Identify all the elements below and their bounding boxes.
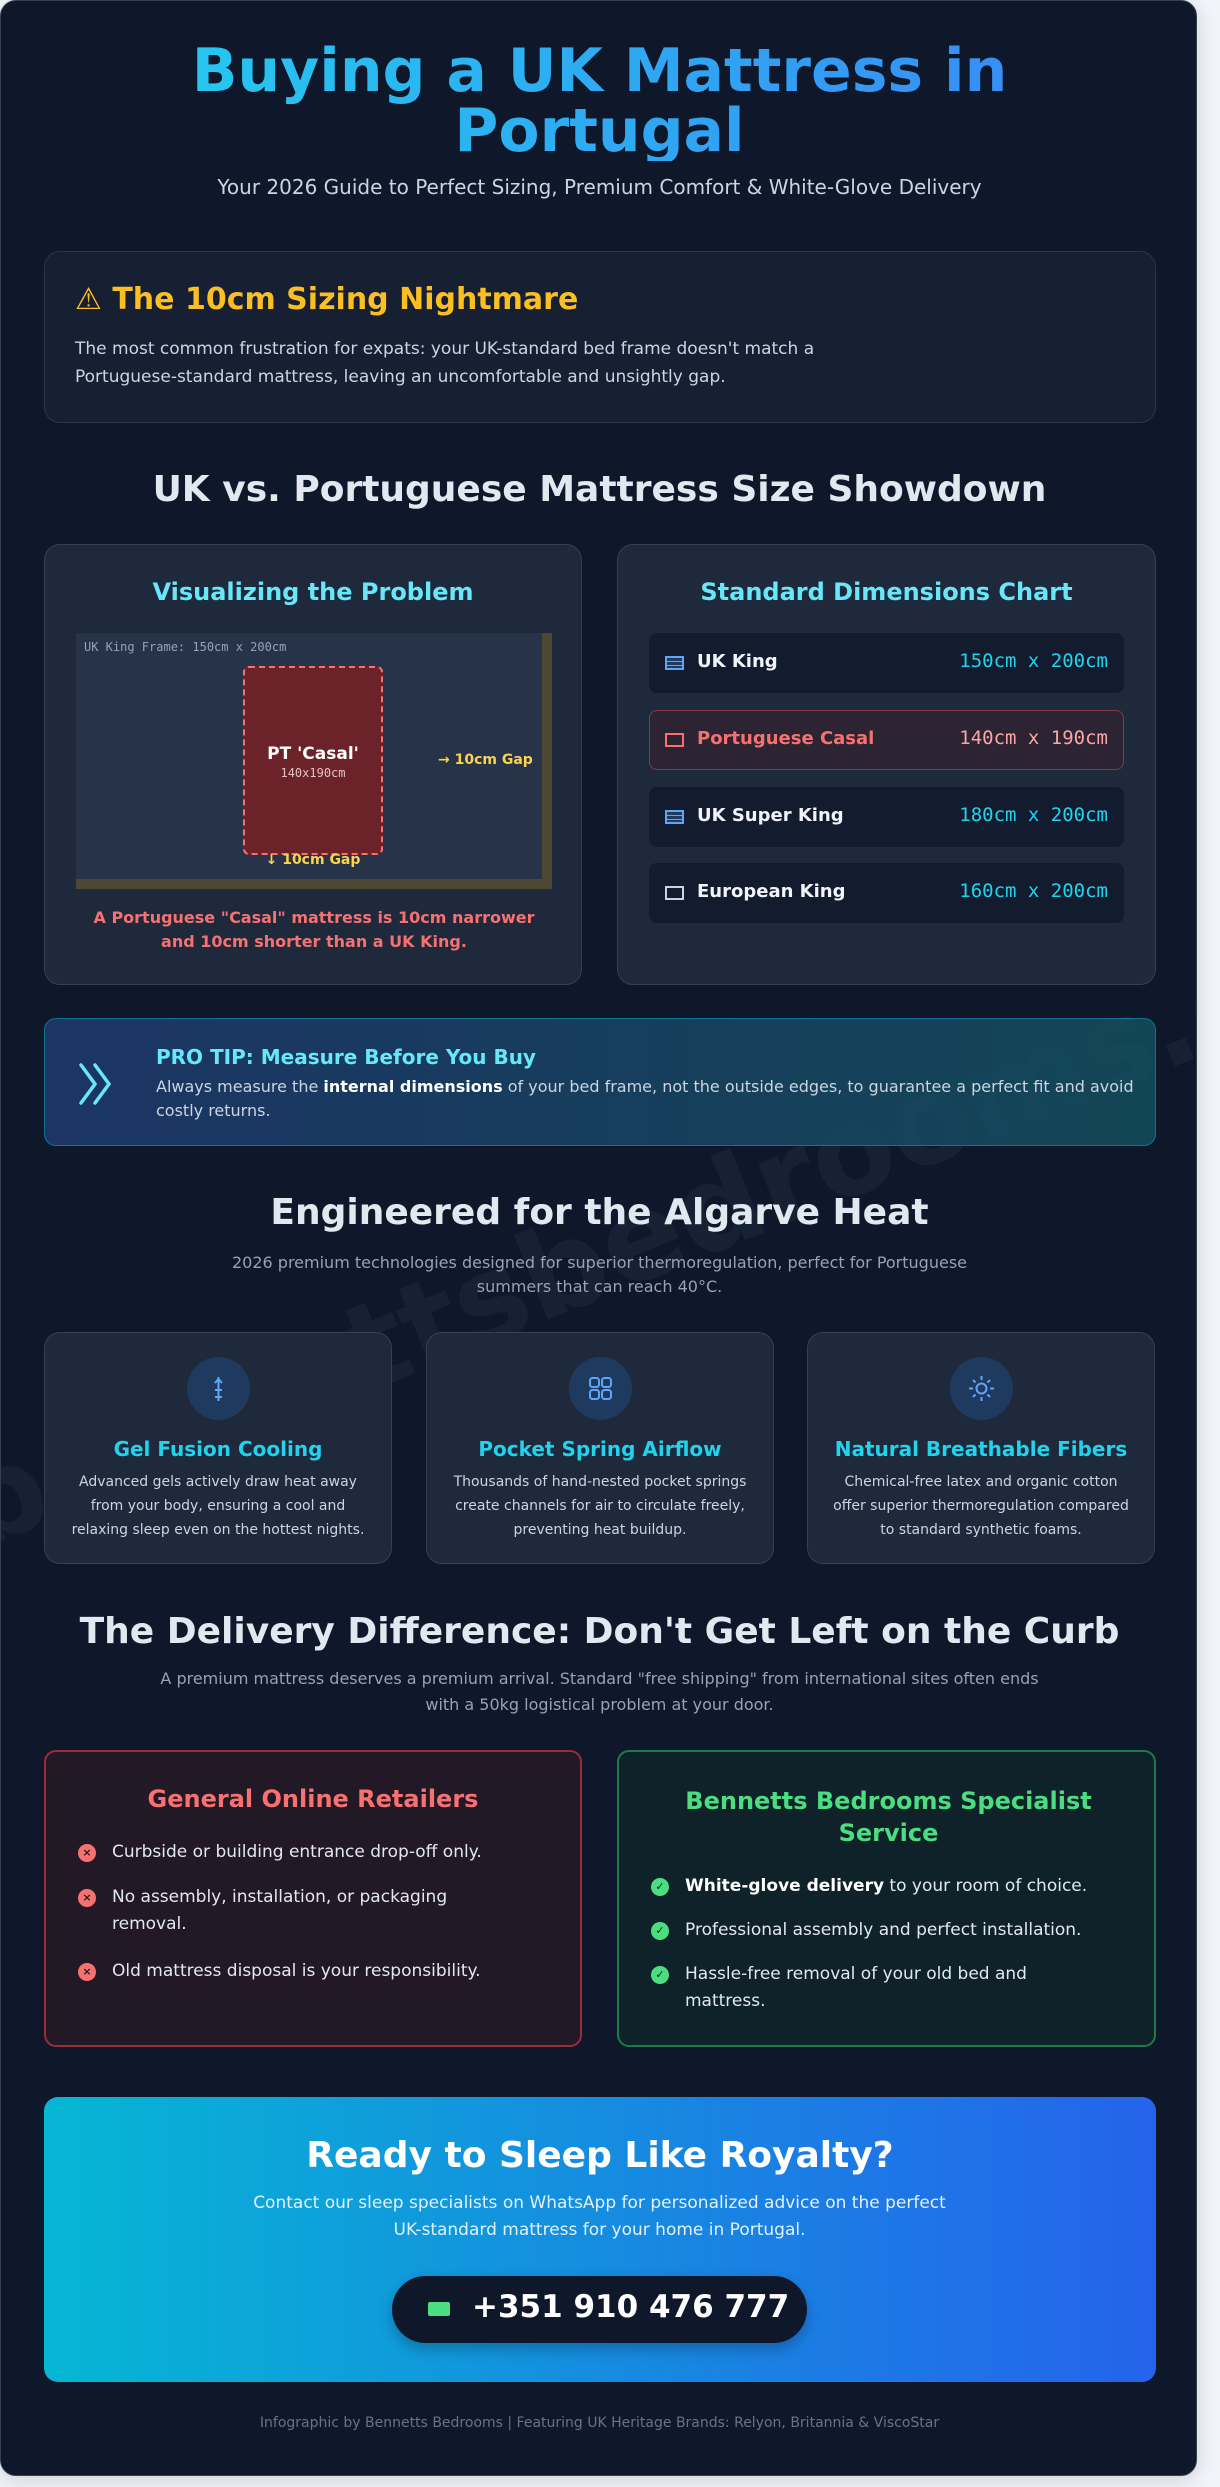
title	[1, 41, 1198, 161]
list item: Hassle-free removal of your old bed and mattress.	[685, 1964, 1027, 2011]
card: pocket spring: Pocket Spring Airflow	[478, 1437, 722, 1461]
list item: ✓	[655, 1968, 665, 1981]
icon: grid	[569, 1357, 632, 1420]
icon: thermometer	[187, 1357, 250, 1420]
panel heading: Visualizing the Problem	[152, 578, 474, 606]
panel heading: Bennetts Bedrooms Specialist Service	[685, 1787, 1092, 1847]
mattress	[243, 666, 383, 855]
mattress: 140x190cm	[280, 766, 346, 780]
panel: visualizing	[44, 544, 582, 985]
text: algarve subtitle: 2026 premium technologies designed for superior thermoregulation, perfect for Portuguese summers that can reach 40°C.	[232, 1253, 967, 1296]
panel: dimensions chart	[617, 544, 1156, 985]
panel heading: Standard Dimensions Chart	[700, 578, 1073, 606]
panel: call to action	[44, 2097, 1156, 2382]
row: uk super king: UK Super King	[697, 805, 844, 826]
icon: whatsapp	[428, 2302, 450, 2316]
gap label bottom: ↓ 10cm Gap	[266, 852, 360, 868]
row: portuguese casal: Portuguese Casal	[697, 728, 874, 749]
tip text: Always measure the internal dimensions of your bed frame, not the outside edges, to guarantee a perfect fit and avoid costly returns.	[156, 1077, 1134, 1120]
card: gel fusion	[44, 1332, 392, 1564]
card: gel fusion: Gel Fusion Cooling	[114, 1437, 322, 1461]
row: uk king: UK King	[697, 651, 778, 672]
row: uk super king: 180cm x 200cm	[959, 804, 1108, 826]
panel: general retailers	[44, 1750, 582, 2047]
list item: No assembly, installation, or packaging removal.	[112, 1887, 447, 1934]
row: european king	[649, 863, 1124, 923]
list item: ×	[82, 1965, 92, 1978]
title: Portugal	[454, 96, 745, 166]
cta heading: Ready to Sleep Like Royalty?	[306, 2135, 894, 2176]
row: uk king: 150cm x 200cm	[959, 650, 1108, 672]
row: uk king	[649, 633, 1124, 693]
mattress: PT 'Casal'	[267, 744, 359, 764]
card: natural fibers: Natural Breathable Fibers	[835, 1437, 1127, 1461]
heading: delivery difference: The Delivery Difference: Don't Get Left on the Curb	[80, 1611, 1119, 1652]
text: nightmare: The most common frustration for expats: your UK-standard bed frame doesn't match a Portuguese-standard mattress, leaving an uncomfortable and unsightly gap.	[75, 339, 814, 387]
card: gel fusion: Advanced gels actively draw heat away from your body, ensuring a cool and relaxing sleep even on the hottest nights.	[72, 1474, 364, 1538]
row: european king: 160cm x 200cm	[959, 880, 1108, 902]
panel heading: General Online Retailers	[148, 1785, 478, 1813]
button: phone	[392, 2276, 807, 2343]
footer: Infographic by Bennetts Bedrooms | Featuring UK Heritage Brands: Relyon, Britannia & ViscoStar	[260, 2415, 939, 2431]
list item: Curbside or building entrance drop-off only.	[112, 1842, 482, 1862]
title: Buying a UK Mattress in	[192, 36, 1007, 106]
frame label: UK King Frame: 150cm x 200cm	[84, 640, 286, 654]
caption: A Portuguese "Casal" mattress is 10cm narrower and 10cm shorter than a UK King.	[93, 908, 534, 951]
heading: nightmare: ⚠ The 10cm Sizing Nightmare	[75, 282, 578, 317]
panel: sizing nightmare	[44, 251, 1156, 423]
row: uk super king	[649, 787, 1124, 847]
list item: Old mattress disposal is your responsibility.	[112, 1961, 481, 1981]
tip heading: PRO TIP: Measure Before You Buy	[156, 1045, 536, 1069]
subtitle: Your 2026 Guide to Perfect Sizing, Premium Comfort & White-Glove Delivery	[217, 175, 982, 199]
callout: pro tip	[44, 1018, 1156, 1146]
card: natural fibers: Chemical-free latex and organic cotton offer superior thermoregulation compared to standard synthetic foams.	[833, 1474, 1129, 1538]
panel: bennetts service	[617, 1750, 1156, 2047]
list item: ×	[82, 1846, 92, 1859]
row: european king: European King	[697, 881, 846, 902]
text: delivery subtitle: A premium mattress deserves a premium arrival. Standard "free shipping" from international sites often ends with a 50kg logistical problem at your door.	[160, 1669, 1039, 1714]
button: phone: +351 910 476 777	[472, 2289, 789, 2325]
card: natural fibers	[807, 1332, 1155, 1564]
list item: ×	[82, 1891, 92, 1904]
diagram: frame	[76, 633, 552, 889]
heading: size showdown: UK vs. Portuguese Mattress Size Showdown	[153, 469, 1046, 510]
list item: Professional assembly and perfect installation.	[685, 1920, 1081, 1940]
list item: ✓	[655, 1880, 665, 1893]
list item: ✓	[655, 1924, 665, 1937]
gap label right: → 10cm Gap	[438, 752, 533, 768]
cta text: Contact our sleep specialists on WhatsApp for personalized advice on the perfect UK-standard mattress for your home in Portugal.	[253, 2193, 946, 2240]
list item: White-glove delivery to your room of choice.	[685, 1876, 1087, 1896]
card: pocket spring	[426, 1332, 774, 1564]
heading: algarve heat: Engineered for the Algarve Heat	[270, 1192, 929, 1233]
row: portuguese casal	[649, 710, 1124, 770]
row: portuguese casal: 140cm x 190cm	[959, 727, 1108, 749]
icon: chevrons	[79, 1063, 112, 1105]
card: pocket spring: Thousands of hand-nested pocket springs create channels for air to circulate freely, preventing heat buildup.	[454, 1474, 746, 1538]
icon: sun	[950, 1357, 1013, 1420]
